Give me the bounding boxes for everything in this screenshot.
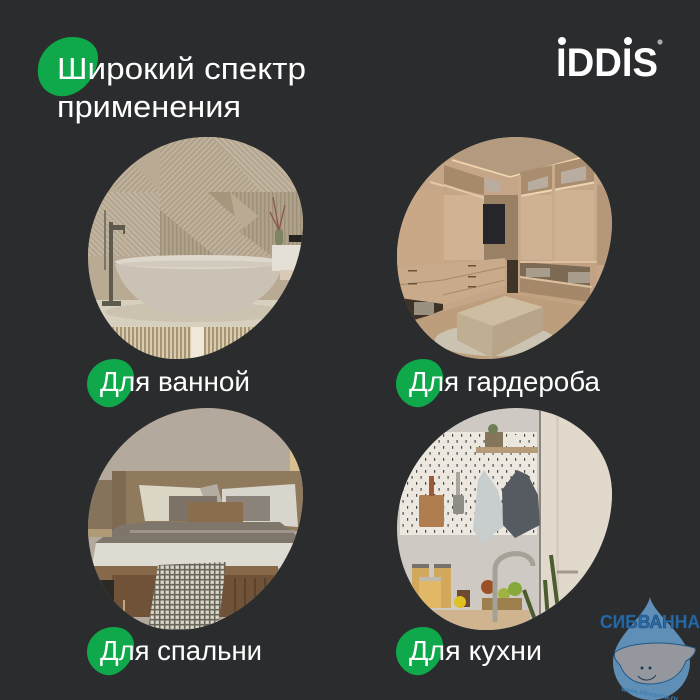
panel: bedroom photo [88,408,303,630]
rug [112,327,254,359]
plant leaves [524,555,558,620]
pillows [139,484,298,527]
label: bedroom: Для спальни [100,635,262,666]
panel: wardrobe photo [397,137,612,359]
label: bathroom [87,359,250,407]
label: wardrobe [396,359,600,407]
panel: bathroom photo [88,137,303,359]
knit throw [148,562,226,630]
jars [412,564,451,610]
faucet [103,210,124,305]
open shelves lower right [505,260,597,305]
ottoman [457,296,543,358]
drawers [397,258,505,322]
shelf with plant [476,424,538,453]
folded bedding [95,522,296,543]
bathtub [115,255,280,304]
title [38,37,306,124]
title: применения [57,89,241,124]
counter [432,610,530,630]
label: bathroom: Для ванной [100,366,250,397]
headboard [80,471,307,531]
label: bedroom [87,627,262,675]
title green blob [38,37,98,96]
floor [96,300,278,330]
fruit basket [481,580,522,613]
storage boxes [485,166,586,193]
floor [415,293,584,359]
watermark name: СИБВАННА [600,612,700,632]
ceiling [436,137,580,176]
faucet [495,554,533,622]
cutting board [419,476,444,527]
label: wardrobe: Для гардероба [409,366,600,397]
bedside [88,529,112,537]
right wardrobe bays [518,158,612,265]
pegboard [400,432,537,535]
bath character [614,643,695,684]
hanging clothes [483,204,505,244]
white duvet [92,543,294,568]
towels [473,470,540,544]
water drop [613,597,690,700]
door [539,410,612,614]
panel: kitchen photo [397,408,612,630]
grater [453,472,464,514]
side table [272,235,302,280]
logo: IDDIS: IDDIS [556,41,658,85]
label: kitchen: Для кухни [409,635,542,666]
vase with branches [270,197,285,245]
pepper mill and lemon [454,590,470,608]
left wardrobe bays [397,157,583,265]
bench [94,566,278,617]
label: kitchen [396,627,542,675]
title text: Широкий спектр [57,51,306,86]
watermark: Sibvanna [600,597,700,700]
wall panels [88,137,303,256]
